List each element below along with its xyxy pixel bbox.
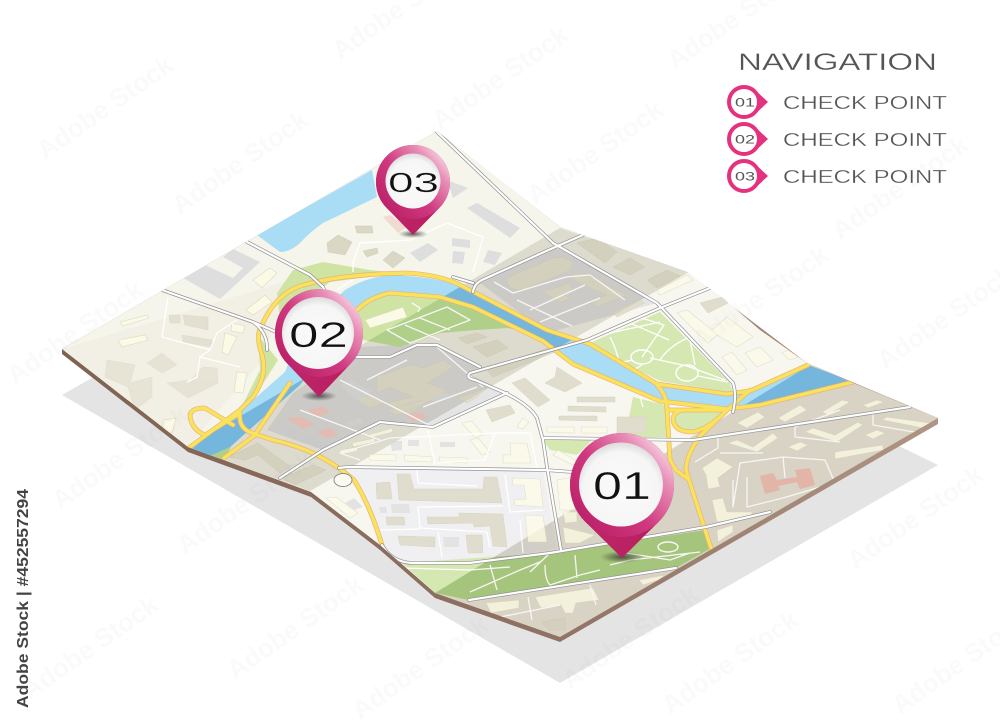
watermark pattern: Adobe Stock xyxy=(46,399,194,515)
south district xyxy=(535,588,599,613)
legend row 02 xyxy=(729,124,947,154)
map base xyxy=(62,132,938,637)
pin 03: 03 xyxy=(388,167,439,198)
watermark pattern: Adobe Stock xyxy=(1,274,149,390)
isometric city map xyxy=(62,131,938,637)
legend row 02: 02 xyxy=(735,132,755,146)
north water body xyxy=(257,170,377,252)
fold band top shading xyxy=(188,228,689,491)
legend row 02: CHECK POINT xyxy=(783,130,947,150)
watermark pattern: Adobe Stock xyxy=(166,104,314,220)
watermark pattern: Adobe Stock xyxy=(346,609,494,725)
buildings xyxy=(105,180,930,630)
pin 02: 02 xyxy=(289,316,348,355)
stock label: Adobe Stock | #452557294 xyxy=(15,489,32,708)
island xyxy=(365,307,407,328)
watermark pattern: Adobe Stock xyxy=(686,239,834,355)
watermark pattern: Adobe Stock xyxy=(426,19,574,135)
south-east district xyxy=(737,412,765,428)
pin 01: 01 xyxy=(593,465,651,508)
map edge thickness xyxy=(62,131,938,642)
river in shaded folds xyxy=(192,287,571,456)
city blocks xyxy=(267,248,654,449)
parks in south-east panel xyxy=(435,530,709,600)
legend row 01 xyxy=(729,87,947,117)
watermark pattern: Adobe Stock xyxy=(31,49,179,165)
legend row 03: CHECK POINT xyxy=(783,167,947,187)
legend row 03 xyxy=(729,161,947,191)
pin 03 xyxy=(376,145,450,238)
west district xyxy=(120,315,149,326)
pin 01 xyxy=(570,433,674,563)
streets xyxy=(162,132,910,600)
watermark pattern: Adobe Stock xyxy=(171,444,319,560)
watermark pattern: Adobe Stock xyxy=(841,459,989,575)
south-east panel base shading xyxy=(437,365,938,637)
ground shadow xyxy=(62,322,938,683)
secondary paths xyxy=(162,223,920,620)
river xyxy=(188,275,853,458)
fold band base shading xyxy=(188,228,689,491)
roundabout xyxy=(334,474,352,486)
yellow highway casing xyxy=(190,273,853,548)
central gray district xyxy=(377,360,453,415)
east district xyxy=(677,310,753,347)
light panel sheen xyxy=(310,272,810,593)
watermark pattern: Adobe Stock xyxy=(826,129,974,245)
watermark pattern: Adobe Stock xyxy=(556,579,704,695)
legend row 01: CHECK POINT xyxy=(783,93,947,113)
north-east gray district xyxy=(507,258,572,290)
street casing xyxy=(162,132,910,600)
north district xyxy=(183,249,260,299)
watermark pattern: Adobe Stock xyxy=(521,94,669,210)
south-east panel top shading xyxy=(470,400,928,620)
watermark pattern: Adobe Stock xyxy=(16,589,164,705)
watermark pattern: Adobe Stock xyxy=(656,604,804,720)
yellow highway xyxy=(190,273,853,548)
legend title: NAVIGATION xyxy=(738,49,937,76)
park roundels xyxy=(631,350,698,552)
green parks xyxy=(208,262,732,600)
left panel tint xyxy=(62,349,188,447)
lavender block xyxy=(397,474,502,503)
watermark pattern: Adobe Stock xyxy=(221,569,369,685)
parks in fold band xyxy=(212,300,512,459)
river mouth shaded xyxy=(745,366,850,404)
legend row 03: 03 xyxy=(735,170,755,184)
legend row 01: 01 xyxy=(735,96,755,110)
pin 02 xyxy=(275,289,363,401)
mid district xyxy=(512,378,550,407)
